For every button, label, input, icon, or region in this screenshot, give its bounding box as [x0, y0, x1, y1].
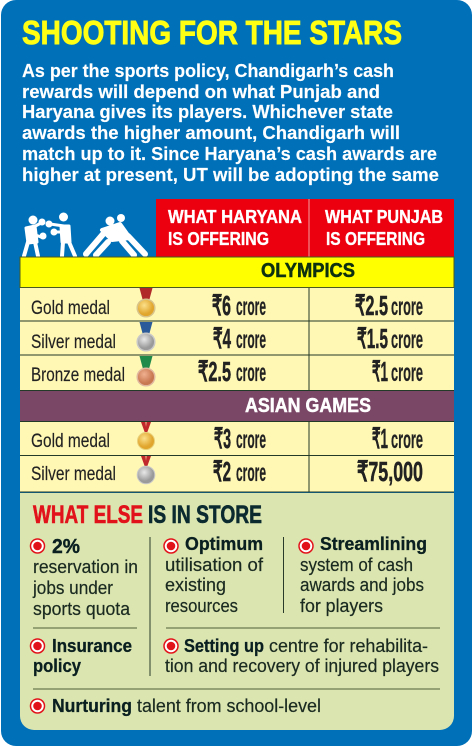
intro text block [22, 60, 439, 185]
row: silver [31, 456, 423, 487]
icon: wrestlers [86, 214, 145, 255]
table: Asian Games rows [20, 421, 454, 492]
row: gold: ₹3 [214, 423, 231, 454]
heading: WHAT ELSE [33, 501, 143, 529]
intro text block: awards the higher amount, Chandigarh will [22, 122, 400, 143]
row: silver: ₹75,000 [357, 456, 423, 487]
row: silver: ₹2 [213, 456, 231, 487]
intro text block: Haryana gives its players. Whichever state [22, 101, 393, 122]
Asian Games band: ASIAN GAMES [245, 395, 371, 417]
heading: IS IN STORE [148, 501, 262, 529]
row: silver: Silver medal [31, 464, 116, 485]
row: gold [31, 422, 423, 454]
intro text block: match up to it. Since Haryana’s cash awards are [22, 143, 437, 164]
item: 2% reservation [30, 536, 138, 619]
row: silver: crore [236, 326, 266, 354]
row: gold: crore [391, 426, 423, 454]
row: gold: crore [391, 293, 423, 321]
item: 2% reservation: sports quota [33, 599, 131, 619]
row: bronze: Bronze medal [31, 365, 125, 386]
row: gold: ₹1 [372, 423, 388, 454]
heading [33, 501, 262, 529]
row: silver: ₹1.5 [357, 323, 388, 354]
header: Haryana: IS OFFERING [168, 229, 269, 249]
item: streamlining: Streamlining [320, 534, 427, 554]
row: gold [31, 288, 423, 321]
row: bronze: ₹1 [372, 356, 388, 387]
Olympics band: OLYMPICS [261, 260, 355, 282]
intro text block: higher at present, UT will be adopting the same [22, 164, 439, 185]
item: nurturing: talent from school-level [137, 696, 321, 716]
intro text block: As per the sports policy, Chandigarh’s cash [22, 60, 394, 81]
row: bronze: crore [236, 359, 266, 387]
row: gold: Gold medal [31, 298, 110, 319]
item: insurance policy: Insurance [52, 636, 132, 656]
item: nurturing [30, 696, 321, 716]
header: Haryana [168, 207, 302, 249]
row: gold: ₹2.5 [355, 290, 388, 321]
row: bronze [31, 356, 423, 387]
item: nurturing: Nurturing [52, 696, 132, 716]
intro text block: rewards will depend on what Punjab and [22, 81, 380, 102]
item: optimum utilisation: Optimum [185, 534, 263, 554]
header: Haryana: WHAT HARYANA [168, 207, 302, 227]
item: optimum utilisation [164, 534, 264, 616]
row: gold: crore [236, 293, 266, 321]
item: optimum utilisation: utilisation of [165, 555, 264, 575]
row: bronze: crore [391, 359, 423, 387]
item: setting up: tion and recovery of injured players [165, 656, 439, 676]
row: silver: crore [391, 326, 423, 354]
table header: red [156, 199, 454, 257]
row: silver [31, 322, 423, 354]
item: optimum utilisation: existing [165, 575, 226, 595]
item: streamlining: for players [300, 596, 383, 616]
row: gold: Gold medal [31, 431, 110, 452]
row: silver: crore [236, 459, 266, 487]
Asian Games band [20, 391, 454, 421]
header: Punjab: WHAT PUNJAB [325, 207, 443, 227]
row: gold: crore [236, 426, 266, 454]
item: streamlining: system of cash [300, 555, 413, 575]
header: Punjab [325, 207, 443, 249]
row: silver: Silver medal [31, 332, 116, 353]
row: gold: ₹6 [212, 290, 231, 321]
item: streamlining: awards and jobs [300, 575, 424, 595]
item: optimum utilisation: resources [165, 596, 238, 616]
item: setting up: Setting up [184, 636, 264, 656]
item: setting up [164, 636, 439, 676]
item: insurance policy [30, 636, 132, 676]
Olympics band [20, 257, 454, 288]
item: 2% reservation: 2% [52, 536, 80, 558]
item: 2% reservation: reservation in [33, 557, 138, 577]
row: bronze: ₹2.5 [198, 356, 231, 387]
icon: boxers [24, 212, 75, 256]
table: Olympics rows [20, 288, 454, 390]
item: 2% reservation: jobs under [32, 578, 113, 598]
title: SHOOTING FOR THE STARS [22, 15, 402, 52]
panel: what else is in store [20, 493, 454, 730]
item: setting up: centre for rehabilita- [269, 636, 428, 656]
item: insurance policy: policy [33, 656, 81, 676]
row: silver: ₹4 [213, 323, 231, 354]
header: Punjab: IS OFFERING [326, 229, 425, 249]
item: streamlining [299, 534, 427, 616]
